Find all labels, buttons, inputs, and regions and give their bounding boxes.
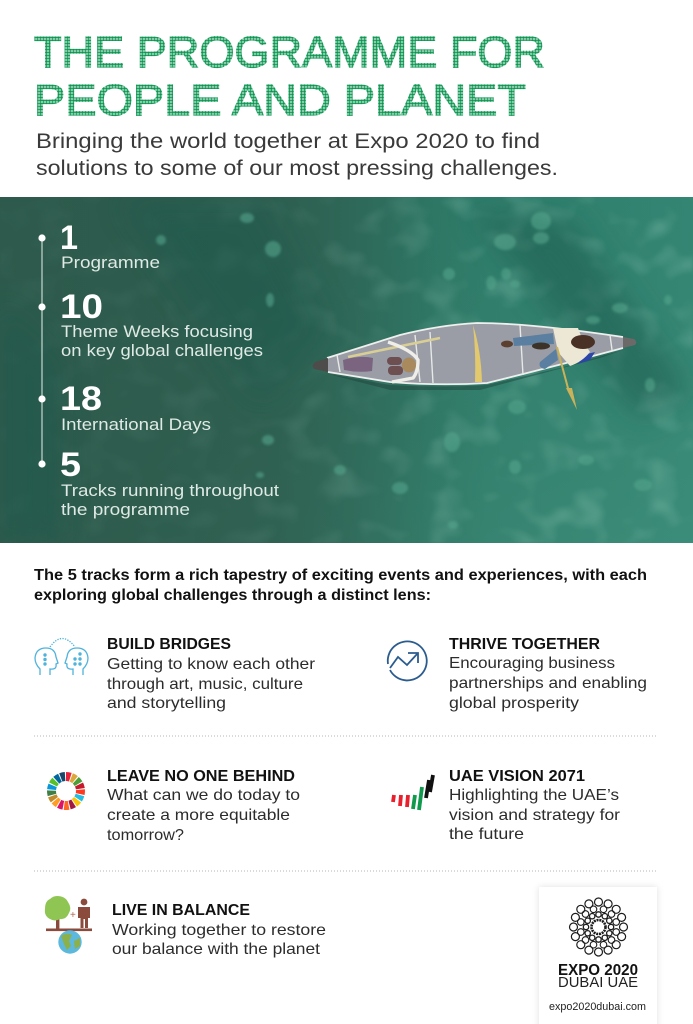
photo: canoe on green water (0, 197, 693, 543)
track: build bridges: Getting to know each other (107, 656, 316, 673)
track: UAE vision 2071: Highlighting the UAE’s (449, 787, 619, 804)
logo rings (570, 898, 628, 956)
track: UAE vision 2071 (449, 768, 621, 843)
subtitle: solutions to some of our most pressing challenges. (36, 156, 558, 180)
icon: build bridges heads (35, 638, 88, 675)
icon: thrive together chart (388, 641, 427, 680)
track: build bridges: through art, music, culture (107, 676, 303, 693)
track: UAE vision 2071: UAE VISION 2071 (449, 768, 585, 785)
track: leave no one behind: LEAVE NO ONE BEHIND (107, 768, 295, 785)
track: thrive together: partnerships and enabling (449, 675, 647, 692)
stat: 5 tracks: Tracks running throughout (61, 481, 279, 500)
title (34, 28, 545, 125)
stat: 10 theme weeks: on key global challenges (61, 341, 263, 360)
track: leave no one behind: What can we do today to (107, 787, 300, 804)
track: live in balance: LIVE IN BALANCE (112, 902, 250, 919)
icon: live in balance: + (70, 910, 76, 921)
subtitle: Bringing the world together at Expo 2020 to find (36, 129, 540, 153)
subtitle (36, 129, 558, 180)
logo card: Expo 2020 Dubai UAE (539, 887, 657, 1024)
stat: 18 international days: 18 (60, 380, 102, 418)
track: live in balance: Working together to restore (112, 922, 326, 939)
logo wordmark: EXPO 2020 (558, 962, 638, 979)
track: live in balance (112, 902, 326, 958)
icon: live in balance (45, 896, 92, 954)
track: leave no one behind: tomorrow? (107, 827, 184, 844)
stat: 1 programme: Programme (61, 253, 160, 272)
stat: 5 tracks: the programme (61, 500, 190, 519)
stat: 10 theme weeks (60, 288, 263, 360)
title: PEOPLE AND PLANET (34, 76, 526, 125)
intro text: exploring global challenges through a distinct lens: (34, 587, 431, 604)
stat: 10 theme weeks: Theme Weeks focusing (61, 322, 253, 341)
intro text: The 5 tracks form a rich tapestry of exciting events and experiences, with each (34, 567, 647, 584)
track: UAE vision 2071: vision and strategy for (449, 807, 621, 824)
track: build bridges: BUILD BRIDGES (107, 636, 231, 653)
track: UAE vision 2071: the future (449, 826, 524, 843)
logo url: expo2020dubai.com (549, 1001, 646, 1013)
logo wordmark: DUBAI UAE (558, 975, 638, 991)
intro text (34, 567, 647, 604)
track: build bridges (107, 636, 316, 712)
stat: 18 international days (60, 380, 211, 434)
canoe (313, 323, 636, 410)
stat: 1 programme (60, 219, 160, 272)
track: thrive together: global prosperity (449, 695, 579, 712)
track: thrive together (449, 636, 647, 712)
logo wordmark (558, 962, 638, 991)
icon: SDG wheel (46, 771, 86, 811)
title: THE PROGRAMME FOR (34, 28, 545, 77)
track: leave no one behind: create a more equitable (107, 807, 290, 824)
stat: 1 programme: 1 (60, 219, 78, 257)
track: build bridges: and storytelling (107, 695, 226, 712)
stat: 5 tracks (60, 446, 279, 519)
track: leave no one behind (107, 768, 300, 844)
stat: 5 tracks: 5 (60, 446, 81, 484)
icon: UAE vision bars (393, 775, 433, 810)
stat: 10 theme weeks: 10 (60, 288, 103, 326)
track: live in balance: our balance with the planet (112, 941, 321, 958)
timeline (38, 234, 46, 468)
stat: 18 international days: International Days (61, 415, 211, 434)
track: thrive together: Encouraging business (449, 655, 615, 672)
track: thrive together: THRIVE TOGETHER (449, 636, 600, 653)
